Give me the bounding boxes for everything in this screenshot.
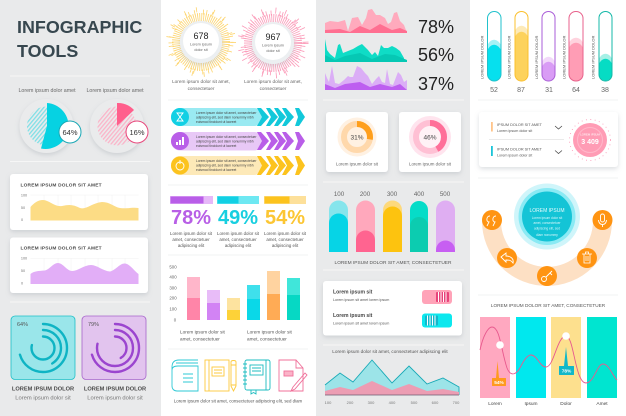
- panel: yellow area chart: 50: [21, 206, 25, 210]
- icon: quotes: [482, 210, 502, 230]
- panel: purple radial gauge: [82, 316, 146, 402]
- central circle: LOREM IPSUM: [529, 208, 565, 214]
- icon: book: [172, 360, 198, 391]
- central circle: diam nonummy: [536, 233, 558, 237]
- tube gauges: LOREM IPSUM DOLOR: [506, 36, 512, 79]
- panel: yellow area chart: LOREM IPSUM DOLOR SIT AMET: [20, 182, 102, 188]
- title: INFOGRAPHIC: [17, 17, 142, 37]
- line area chart: 600: [432, 400, 439, 405]
- wave chart panel: Dolor: [560, 401, 572, 407]
- panel: donut 31%: Lorem ipsum dolor sit: [336, 162, 379, 166]
- panel: toggles: [323, 281, 462, 336]
- stat 78%: [170, 196, 213, 248]
- radial burst 967: 967: [265, 32, 281, 42]
- area chart 56%: [325, 39, 454, 65]
- banner: yellow arrows: Lorem ipsum dolor sit amet, consectetuer: [196, 159, 257, 163]
- capsule bar chart: 200: [360, 191, 371, 198]
- line area chart: Lorem ipsum dolor sit amet, consectetuer adipiscing elit: [332, 349, 448, 354]
- panel: teal radial gauge: 64%: [17, 322, 28, 328]
- panel: yellow area chart: 0: [21, 218, 23, 222]
- callout 54%: 54%: [494, 380, 505, 386]
- panel: teal radial gauge: [11, 316, 75, 402]
- panel: purple area chart: LOREM IPSUM DOLOR SIT AMET: [20, 246, 102, 252]
- central circle: Lorem ipsum dolor sit: [532, 216, 562, 220]
- banner: purple arrows: euismod tincidunt ut laoreet: [196, 144, 236, 148]
- area chart 56%: 56%: [418, 45, 454, 65]
- area chart 37%: 37%: [418, 74, 454, 94]
- wave chart panel: Ipsum: [524, 401, 538, 407]
- panel: toggles: Lorem ipsum sit amet lorem ipsum: [333, 322, 389, 326]
- panel: dropdown list with counter: Lorem ipsum dolor sit: [497, 129, 532, 133]
- stat 54%: [264, 196, 307, 248]
- panel: yellow area chart: 100: [21, 194, 27, 198]
- panel: toggles: Lorem ipsum sit: [333, 290, 373, 296]
- stat 78%: Lorem ipsum dolor sit: [170, 231, 213, 236]
- capsule bar chart: LOREM IPSUM DOLOR SIT AMET, CONSECTETUER: [335, 260, 452, 266]
- radial burst 678: [168, 10, 234, 91]
- icon: notebook and pencil: [205, 360, 236, 391]
- panel: purple area chart: [10, 238, 148, 293]
- bar chart: 500: [169, 264, 177, 270]
- stat 49%: [217, 196, 260, 248]
- title: [17, 17, 142, 61]
- tube gauges: LOREM IPSUM DOLOR: [590, 36, 596, 79]
- bar chart: Lorem ipsum dolor sit: [247, 330, 293, 334]
- panel: teal radial gauge: LOREM IPSUM DOLOR: [12, 386, 74, 392]
- central circle: amet, consectetuer: [533, 221, 561, 225]
- area chart 37%: [325, 66, 454, 94]
- radial burst 967: Lorem ipsum: [262, 44, 284, 48]
- wave chart panel: [480, 317, 617, 407]
- stat 49%: 49%: [218, 207, 258, 229]
- icon: spiral notebook: [243, 360, 270, 394]
- caption under icons: Lorem ipsum dolor sit amet, consectetuer adipiscing elit, sed diam: [174, 398, 303, 404]
- tube gauges: 52: [490, 87, 498, 94]
- panel: dropdown list with counter: [479, 112, 618, 167]
- capsule bar chart: 400: [414, 191, 425, 198]
- panel: yellow area chart: [10, 174, 148, 230]
- tube gauges: 64: [572, 87, 580, 94]
- capsule bar chart: 500: [440, 191, 451, 198]
- panel: donut 46%: Lorem ipsum dolor sit: [409, 162, 452, 166]
- wave chart panel: Lorem: [488, 401, 502, 407]
- tube gauges: 87: [517, 87, 525, 94]
- bar chart: amet, consectetuer: [247, 336, 287, 342]
- radial burst 678: Lorem ipsum dolor sit amet,: [172, 79, 230, 84]
- radial burst 967: Lorem ipsum dolor sit amet,: [244, 79, 302, 84]
- pie chart 64%: Lorem ipsum dolor amet: [18, 88, 76, 94]
- bar chart: 300: [169, 286, 177, 290]
- title: TOOLS: [17, 41, 78, 61]
- panel: purple area chart: 0: [21, 282, 23, 286]
- tube gauges: LOREM IPSUM DOLOR: [534, 36, 539, 79]
- pie chart 64%: [18, 88, 81, 153]
- area chart 78%: 78%: [418, 17, 454, 37]
- panel: donut 46%: [399, 112, 461, 172]
- stat 78%: 78%: [171, 207, 211, 229]
- banner: yellow arrows: [171, 156, 305, 175]
- capsule bar chart: 300: [387, 191, 398, 198]
- banner: cyan arrows: Lorem ipsum dolor sit amet, consectetuer: [196, 111, 257, 115]
- stat 54%: amet, consectetuer: [266, 237, 304, 242]
- stat 54%: 54%: [265, 207, 305, 229]
- central circle: adipiscing elit, sed: [534, 226, 560, 230]
- capsule bar chart: [329, 191, 455, 266]
- stat 78%: amet, consectetuer: [172, 237, 210, 242]
- radial burst 967: [240, 10, 306, 91]
- bar chart: 100: [169, 306, 177, 312]
- bar chart: 400: [169, 274, 177, 280]
- radial burst 678: 678: [193, 31, 209, 41]
- panel: dropdown list with counter: Lorem ipsum dolor sit: [497, 154, 532, 158]
- panel: purple radial gauge: 79%: [88, 322, 99, 328]
- banner: cyan arrows: adipiscing elit, sed diam nonummy nibh: [196, 116, 254, 120]
- icon: key: [537, 266, 557, 286]
- stat 54%: Lorem ipsum dolor sit: [264, 231, 307, 236]
- area chart 78%: [325, 9, 454, 37]
- banner: purple arrows: [171, 132, 305, 150]
- panel: dropdown list with counter: 3 409: [581, 139, 599, 146]
- stat 49%: adipiscing elit: [225, 243, 252, 248]
- bar chart: [169, 264, 300, 342]
- radial burst 678: consectetuer: [188, 86, 215, 91]
- pie chart 16%: Lorem ipsum dolor amet: [86, 88, 144, 94]
- icon: microphone: [592, 210, 612, 230]
- banner: purple arrows: adipiscing elit, sed diam nonummy nibh: [196, 140, 254, 144]
- callout 78%: 78%: [562, 368, 572, 374]
- panel: purple radial gauge: LOREM IPSUM DOLOR: [84, 386, 146, 392]
- pie chart 16%: [86, 88, 148, 153]
- central circle: [514, 184, 580, 250]
- semicircle menu: [482, 184, 612, 286]
- panel: dropdown list with counter: IPSUM DOLOR SIT AMET: [497, 148, 543, 152]
- panel: dropdown list with counter: IPSUM DOLOR SIT AMET: [497, 123, 543, 127]
- panel: purple area chart: 100: [21, 256, 27, 260]
- tube gauges: 38: [601, 87, 609, 94]
- stat 49%: amet, consectetuer: [219, 237, 257, 242]
- stat 54%: adipiscing elit: [272, 243, 299, 248]
- banner: yellow arrows: euismod tincidunt ut laoreet: [196, 168, 236, 172]
- radial burst 967: consectetuer: [260, 86, 287, 91]
- banner: cyan arrows: [171, 108, 305, 126]
- panel: dropdown list with counter: LOREM IPSUM: [580, 132, 600, 136]
- panel: teal radial gauge: Lorem ipsum dolor sit: [15, 396, 71, 402]
- stat 49%: Lorem ipsum dolor sit: [217, 231, 260, 236]
- panel: toggles: Lorem ipsum sit: [333, 313, 373, 319]
- tube gauges: LOREM IPSUM DOLOR: [562, 36, 566, 79]
- panel: toggles: Lorem ipsum sit amet lorem ipsum: [333, 298, 389, 302]
- line area chart: 400: [389, 400, 396, 405]
- panel: purple radial gauge: Lorem ipsum dolor sit: [87, 396, 143, 402]
- panel: donut 46%: 46%: [423, 134, 437, 142]
- banner: purple arrows: Lorem ipsum dolor sit amet, consectetuer: [196, 135, 257, 139]
- panel: purple area chart: 50: [21, 269, 25, 273]
- icon: document and pen: [279, 360, 307, 391]
- line area chart: 500: [411, 400, 418, 405]
- line area chart: 300: [368, 400, 375, 405]
- line area chart: [325, 349, 460, 405]
- radial burst 678: Lorem ipsum: [190, 42, 212, 46]
- capsule bar chart: 100: [334, 191, 345, 198]
- line area chart: 700: [453, 400, 460, 405]
- banner: cyan arrows: euismod tincidunt ut laoreet: [196, 120, 236, 124]
- banner: yellow arrows: adipiscing elit, sed diam nonummy nibh: [196, 164, 254, 168]
- bar chart: amet, consectetuer: [180, 336, 220, 342]
- bar chart: Lorem ipsum dolor sit: [180, 330, 226, 334]
- line area chart: 200: [347, 400, 354, 405]
- pie chart 16%: 16%: [129, 128, 145, 137]
- icon: trash: [577, 248, 597, 268]
- tube gauges: [480, 12, 612, 94]
- bar chart: 0: [174, 318, 177, 322]
- tube gauges: 31: [545, 87, 553, 94]
- icon: reply: [497, 248, 517, 268]
- caption: LOREM IPSUM DOLOR SIT AMET, CONSECTETUER: [491, 303, 606, 308]
- stat 78%: adipiscing elit: [178, 243, 205, 248]
- radial burst 967: dolor sit: [266, 49, 281, 53]
- bar chart: 200: [169, 296, 177, 300]
- wave chart panel: Amet: [596, 401, 608, 407]
- radial burst 678: dolor sit: [194, 48, 209, 52]
- pie chart 64%: 64%: [62, 128, 78, 137]
- panel: donut 31%: 31%: [350, 134, 364, 142]
- line area chart: 100: [325, 400, 332, 405]
- tube gauges: LOREM IPSUM DOLOR: [480, 36, 484, 79]
- panel: donut 31%: [326, 112, 388, 172]
